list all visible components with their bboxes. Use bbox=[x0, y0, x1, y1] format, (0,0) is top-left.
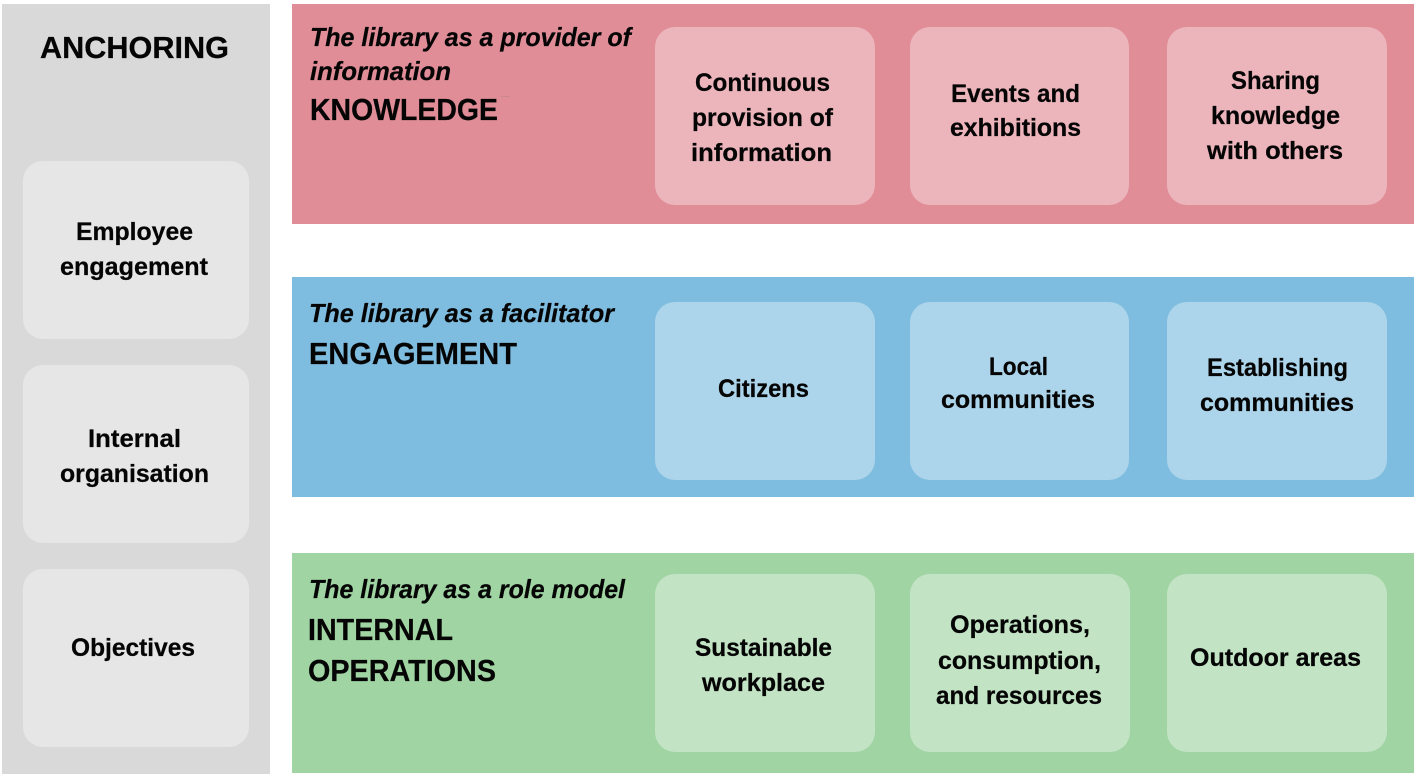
panel: knowledge bbox=[292, 4, 1414, 224]
panel: internal operations bbox=[292, 553, 1414, 773]
card: employee engagement: engagement bbox=[60, 253, 209, 281]
card: sustainable workplace: Sustainable bbox=[695, 634, 832, 662]
card: objectives: Objectives bbox=[71, 634, 195, 662]
subtitle: provider of information: The library as a provider of bbox=[310, 22, 633, 52]
card: continuous provision of information: information bbox=[691, 139, 832, 167]
card: objectives bbox=[23, 569, 249, 747]
card: establishing communities: Establishing bbox=[1207, 354, 1348, 382]
panel: anchoring bbox=[2, 4, 270, 774]
card: internal organisation: organisation bbox=[60, 460, 209, 488]
card: sustainable workplace bbox=[655, 574, 875, 752]
card: local communities: Local bbox=[989, 353, 1048, 381]
card: citizens: Citizens bbox=[718, 375, 809, 403]
card: internal organisation: Internal bbox=[88, 425, 181, 453]
card: establishing communities bbox=[1167, 302, 1387, 480]
heading: internal operations: OPERATIONS bbox=[308, 653, 496, 688]
card: continuous provision of information bbox=[655, 27, 875, 205]
heading: internal operations: INTERNAL bbox=[308, 612, 453, 647]
heading: engagement: ENGAGEMENT bbox=[309, 336, 517, 371]
card: local communities: communities bbox=[941, 386, 1095, 414]
card: sharing knowledge with others: knowledge bbox=[1211, 102, 1340, 130]
card: local communities bbox=[910, 302, 1129, 480]
heading: knowledge: KNOWLEDGE bbox=[310, 92, 498, 127]
card: sharing knowledge with others bbox=[1167, 27, 1387, 205]
card: sharing knowledge with others: with others bbox=[1206, 137, 1343, 165]
subtitle: provider of information: information bbox=[310, 56, 451, 86]
card: employee engagement: Employee bbox=[76, 218, 193, 246]
heading: internal operations bbox=[308, 612, 496, 688]
card: sharing knowledge with others: Sharing bbox=[1231, 67, 1320, 95]
card: operations, consumption, and resources: consumption, bbox=[938, 647, 1101, 675]
card: citizens bbox=[655, 302, 875, 480]
card: operations, consumption, and resources: and resources bbox=[936, 682, 1102, 710]
card: continuous provision of information: Continuous bbox=[695, 69, 830, 97]
card: outdoor areas: Outdoor areas bbox=[1190, 644, 1361, 672]
card: events and exhibitions: Events and bbox=[951, 80, 1080, 108]
panel: engagement bbox=[292, 277, 1414, 497]
card: internal organisation bbox=[23, 365, 249, 543]
subtitle: facilitator: The library as a facilitator bbox=[309, 298, 616, 328]
card: events and exhibitions bbox=[910, 27, 1129, 205]
card: sustainable workplace: workplace bbox=[701, 669, 825, 697]
card: establishing communities: communities bbox=[1200, 389, 1354, 417]
heading: anchoring: ANCHORING bbox=[40, 30, 229, 65]
card: events and exhibitions: exhibitions bbox=[950, 114, 1081, 142]
subtitle: role model: The library as a role model bbox=[309, 574, 626, 604]
card: employee engagement bbox=[23, 161, 249, 339]
card: operations, consumption, and resources: Operations, bbox=[950, 611, 1090, 639]
subtitle: provider of information bbox=[310, 22, 633, 86]
card: continuous provision of information: provision of bbox=[692, 104, 834, 132]
card: operations, consumption, and resources bbox=[910, 574, 1130, 752]
card: outdoor areas bbox=[1167, 574, 1387, 752]
